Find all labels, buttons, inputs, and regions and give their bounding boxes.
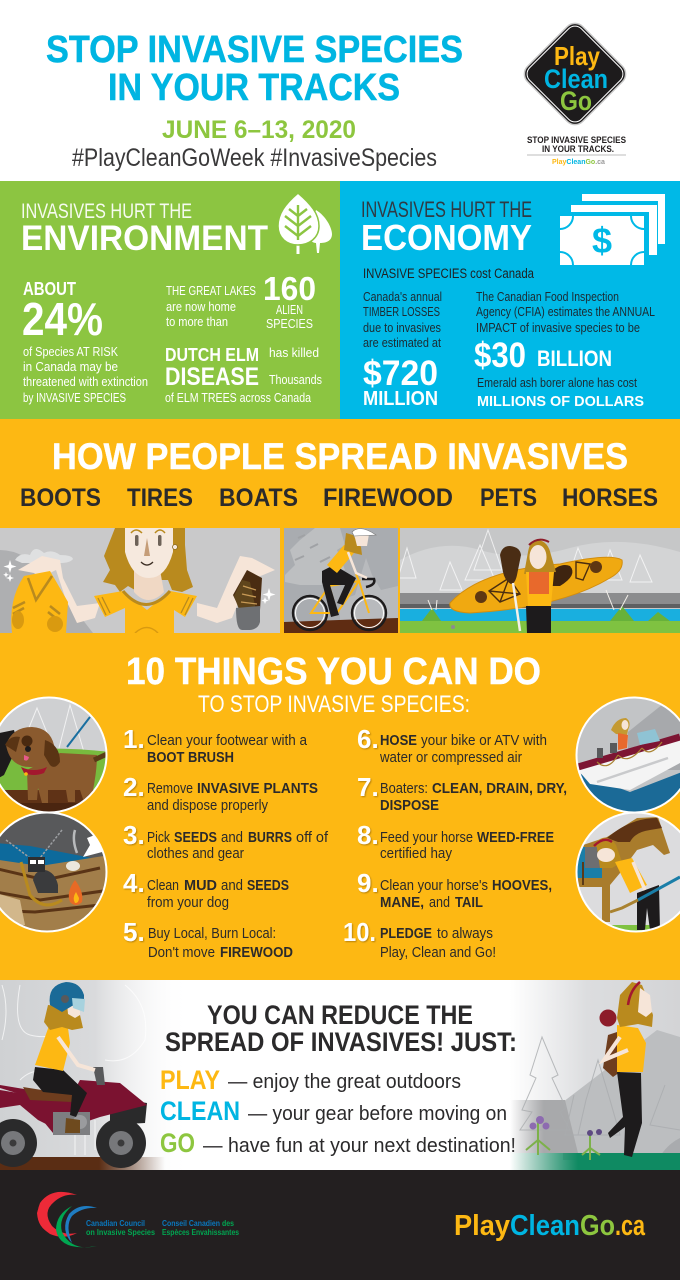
panel: environment [0, 181, 340, 419]
item 10 [343, 917, 496, 961]
illustration: woman holding sock and boot [0, 528, 280, 633]
logo: canadian council on invasive species [37, 1192, 239, 1247]
heading: invasives hurt the environment: ENVIRONMENT [21, 219, 268, 258]
stat: great lakes 160 alien species: to more than [166, 314, 228, 329]
stat: great lakes 160 alien species: 160 [263, 270, 316, 307]
item 8: WEED-FREE [477, 830, 554, 846]
stat: dutch elm disease: of ELM TREES across Canada [165, 390, 312, 405]
list: spread vectors: BOATS [219, 484, 298, 512]
stat: 24 percent [22, 279, 148, 405]
item 7: CLEAN, DRAIN, DRY, [432, 781, 567, 797]
text: clean: CLEAN [160, 1096, 240, 1126]
item 9 [357, 868, 552, 911]
item 4: and [221, 878, 243, 894]
stat: 24 percent: ABOUT [23, 279, 76, 299]
stat: annual impact 30 billion: $30 [474, 336, 526, 375]
list: spread vectors: FIREWOOD [323, 484, 453, 512]
text: play [160, 1065, 461, 1095]
item 2: Remove [147, 781, 193, 797]
item 1: Clean your footwear with a [147, 733, 308, 749]
stat: 24 percent: in Canada may be [23, 359, 118, 374]
logo: playcleango.ca: Play [454, 1210, 510, 1242]
item 6 [357, 724, 547, 766]
text: clean [160, 1096, 507, 1126]
item 7: 7. [357, 772, 379, 802]
title: IN YOUR TRACKS [108, 67, 400, 109]
item 7: DISPOSE [380, 798, 439, 814]
stat: 24 percent: by INVASIVE SPECIES [23, 390, 126, 405]
heading: how people spread invasives: HOW PEOPLE SPREAD INVASIVES [52, 436, 628, 477]
stat: annual impact 30 billion [474, 289, 655, 410]
item 3: and [221, 830, 243, 846]
panel: you can reduce [0, 980, 680, 1170]
hashtags: #PlayCleanGoWeek #InvasiveSpecies [72, 144, 437, 172]
icon circle: horse [574, 810, 680, 935]
icon: leaves [278, 193, 332, 254]
logo: Play Clean Go: Clean [544, 64, 608, 94]
item 2: 2. [123, 772, 145, 802]
item 3: BURRS [248, 830, 292, 846]
item 3: clothes and gear [147, 846, 244, 862]
stat: timber losses [363, 289, 442, 410]
text: play: PLAY [160, 1065, 220, 1095]
panel: economy [340, 181, 680, 419]
list: spread vectors [20, 484, 658, 512]
item 10: to always [437, 926, 493, 942]
item 10: PLEDGE [380, 926, 432, 942]
item 2: INVASIVE PLANTS [197, 781, 318, 797]
item 5: Buy Local, Burn Local: [148, 926, 276, 942]
illustration: woman with kayak [398, 528, 680, 633]
heading: you can reduce the spread: YOU CAN REDUCE THE [207, 1000, 473, 1030]
item 3: 3. [123, 820, 145, 850]
item 4: Clean [147, 878, 179, 894]
item 1: 1. [123, 724, 145, 754]
item 8: 8. [357, 820, 379, 850]
item 4: 4. [123, 868, 145, 898]
logo: Play Clean Go: Play [554, 41, 600, 71]
text: go: — have fun at your next destination! [203, 1135, 516, 1157]
logo: Play Clean Go [520, 19, 630, 166]
logo: Play Clean Go: STOP INVASIVE SPECIES [527, 135, 626, 146]
item 5: FIREWOOD [220, 945, 293, 961]
stat: timber losses: TIMBER LOSSES [363, 304, 440, 319]
logo: Play Clean Go: Go [560, 86, 592, 116]
item 9: HOOVES, [492, 878, 552, 894]
title: STOP INVASIVE SPECIES [46, 29, 463, 71]
stat: timber losses: Canada's annual [363, 289, 442, 304]
logo: canadian council on invasive species: on Invasive Species [86, 1228, 155, 1237]
logo: canadian council on invasive species: Conseil Canadien [162, 1219, 220, 1228]
stat: dutch elm disease: DISEASE [165, 363, 259, 391]
stat: dutch elm disease: Thousands [269, 372, 322, 387]
stat: annual impact 30 billion: The Canadian Food Inspection [476, 289, 619, 304]
stat: dutch elm disease [165, 345, 322, 405]
list: spread vectors: BOOTS [20, 484, 101, 512]
item 3 [123, 820, 329, 862]
stat: great lakes 160 alien species: SPECIES [266, 316, 313, 331]
stat: 24 percent: of Species AT RISK [23, 344, 118, 359]
item 5: Don't move [148, 945, 215, 961]
item 2: and dispose properly [147, 798, 269, 814]
item 4: MUD [184, 878, 217, 894]
logo: canadian council on invasive species: Espèces Envahissantes [162, 1228, 239, 1237]
heading: 10 things you can do [126, 651, 541, 718]
heading: invasives hurt the environment: INVASIVES HURT THE [21, 200, 192, 223]
heading: invasives hurt the environment [21, 200, 268, 258]
logo: Play Clean Go: IN YOUR TRACKS. [542, 144, 614, 155]
panel: how people spread invasives [0, 419, 680, 980]
item 6: water or compressed air [379, 750, 522, 766]
item 4: from your dog [147, 895, 229, 911]
item 7: Boaters: [380, 781, 428, 797]
stat: annual impact 30 billion: Emerald ash borer alone has cost [477, 375, 637, 390]
icon: money bills: $ [592, 220, 612, 261]
stat: dutch elm disease: has killed [269, 345, 319, 360]
icon circle: dog [0, 695, 110, 815]
item 9: and [429, 895, 450, 911]
item 9: MANE, [380, 895, 424, 911]
illustration: ATV rider [0, 982, 165, 1170]
item 1 [123, 724, 308, 766]
logo: canadian council on invasive species: Canadian Council [86, 1219, 145, 1228]
list: spread vectors: TIRES [127, 484, 193, 512]
stat: great lakes 160 alien species [166, 270, 316, 331]
stat: annual impact 30 billion: BILLION [537, 346, 612, 371]
icon: money bills [560, 194, 665, 265]
item 4 [123, 868, 289, 911]
heading: invasives hurt the economy [361, 197, 532, 258]
item 8: Feed your horse [380, 830, 473, 846]
stat: timber losses: due to invasives [363, 320, 441, 335]
text: cost intro: INVASIVE SPECIES cost Canada [363, 266, 534, 281]
item 5 [123, 917, 293, 961]
logo: canadian council on invasive species: des [222, 1219, 234, 1228]
item 7 [357, 772, 567, 814]
heading: 10 things you can do: TO STOP INVASIVE SPECIES: [198, 691, 470, 718]
item 2 [123, 772, 318, 814]
list: spread vectors: HORSES [562, 484, 658, 512]
item 6: HOSE [380, 733, 417, 749]
logo: playcleango.ca: .ca [615, 1210, 646, 1242]
item 6: your bike or ATV with [421, 733, 547, 749]
stat: annual impact 30 billion: IMPACT of invasive species to be [476, 320, 640, 335]
text: go [160, 1128, 516, 1158]
illustration: cyclist [284, 528, 398, 633]
stat: 24 percent: 24% [22, 293, 103, 345]
item 1: BOOT BRUSH [147, 750, 234, 766]
heading: invasives hurt the economy: INVASIVES HURT THE [361, 197, 532, 222]
logo: Play Clean Go: PlayCleanGo.ca [552, 159, 605, 166]
stat: dutch elm disease: DUTCH ELM [165, 345, 259, 365]
item 6: 6. [357, 724, 379, 754]
item 9: TAIL [455, 895, 483, 911]
item 5: 5. [123, 917, 145, 947]
list: things to do, right column [343, 724, 567, 961]
heading: you can reduce the spread [165, 1000, 517, 1057]
item 3: off of [296, 830, 329, 846]
stat: 24 percent: threatened with extinction [23, 374, 148, 389]
list: things to do, left column [123, 724, 329, 961]
logo: playcleango.ca: Clean [510, 1210, 580, 1242]
heading: you can reduce the spread: SPREAD OF INVASIVES! JUST: [165, 1027, 517, 1057]
text: play: — enjoy the great outdoors [228, 1071, 461, 1093]
stat: great lakes 160 alien species: are now home [166, 299, 236, 314]
item 10: 10. [343, 917, 376, 947]
list: spread vectors: PETS [480, 484, 537, 512]
item 8 [357, 820, 554, 862]
icon circle: firewood beetle [0, 810, 110, 935]
logo: playcleango.ca: Go [580, 1210, 615, 1242]
item 9: Clean your horse's [380, 878, 488, 894]
heading: invasives hurt the economy: ECONOMY [361, 217, 532, 258]
item 4: SEEDS [247, 878, 289, 894]
stat: great lakes 160 alien species: THE GREAT LAKES [166, 283, 256, 298]
stat: annual impact 30 billion: MILLIONS OF DOLLARS [477, 393, 644, 410]
panel: footer [0, 1170, 680, 1280]
stat: timber losses: MILLION [363, 388, 438, 410]
stat: great lakes 160 alien species: ALIEN [276, 302, 303, 317]
heading: 10 things you can do: 10 THINGS YOU CAN DO [126, 651, 541, 693]
item 9: 9. [357, 868, 379, 898]
item 8: certified hay [380, 846, 453, 862]
item 3: SEEDS [174, 830, 217, 846]
illustration: hiker with backpack [510, 982, 680, 1170]
title [46, 29, 463, 109]
date: JUNE 6–13, 2020 [162, 116, 356, 144]
item 10: Play, Clean and Go! [380, 945, 496, 961]
text: go: GO [160, 1128, 195, 1158]
stat: timber losses: $720 [363, 354, 438, 393]
text: clean: — your gear before moving on [248, 1103, 507, 1125]
icon circle: boat [576, 696, 680, 813]
item 3: Pick [147, 830, 171, 846]
stat: timber losses: are estimated at [363, 335, 441, 350]
